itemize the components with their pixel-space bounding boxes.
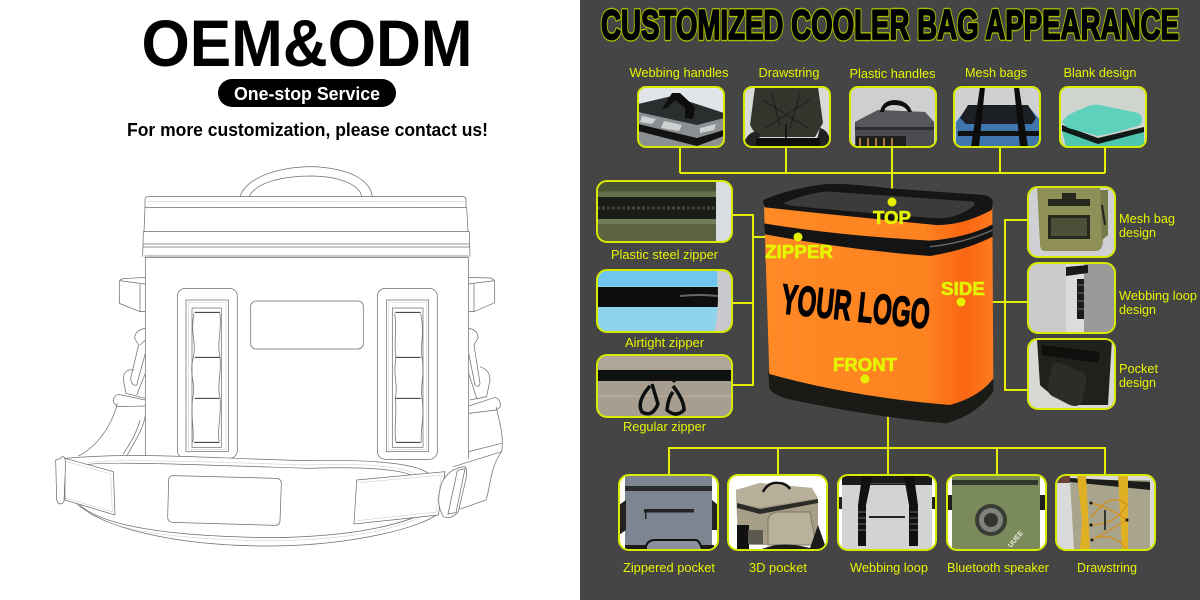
shoulder strap left tail [78, 403, 145, 456]
bag zipper band [764, 223, 993, 256]
top handle [240, 167, 372, 197]
shoulder pad [65, 455, 438, 546]
label: webbing handles: Webbing handles [630, 65, 729, 80]
label: 3D pocket: 3D pocket [749, 560, 807, 575]
marker: zipper: ZIPPER [765, 242, 833, 262]
thumbnail: webbing loop [838, 475, 936, 550]
connector: zipper options [732, 215, 798, 385]
label: mesh bags: Mesh bags [965, 65, 1027, 80]
label: webbing loop design: design [1119, 302, 1156, 317]
label: webbing loop design [1119, 288, 1197, 317]
marker: top: TOP [873, 208, 911, 228]
bag body [764, 207, 993, 405]
text: your logo: YOUR LOGO [779, 275, 932, 338]
left webbing and buckle [56, 456, 115, 515]
marker: zipper [765, 232, 833, 262]
label: regular zipper: Regular zipper [623, 419, 707, 434]
label: pocket design: Pocket [1119, 361, 1158, 376]
bag body sides [145, 258, 469, 458]
right webbing panel [377, 288, 437, 459]
side tab left [119, 277, 145, 312]
thumbnail: mesh bag design [1028, 187, 1115, 257]
thumbnail: 3D pocket [728, 475, 827, 550]
illustration: orange cooler bag [763, 184, 993, 423]
label: zippered pocket: Zippered pocket [623, 560, 715, 575]
thumbnail: plastic handles [850, 87, 936, 147]
label: plastic steel zipper: Plastic steel zipper [611, 247, 719, 262]
thumbnail: pocket design [1028, 339, 1115, 409]
thumbnail: airtight zipper [597, 270, 732, 332]
side tab right [469, 277, 495, 312]
bag rim [763, 184, 993, 225]
marker: side [941, 279, 985, 306]
thumbnail: drawstring [1056, 475, 1155, 550]
right carabiner [469, 328, 500, 413]
panel: OEM and ODM white side [0, 0, 580, 600]
marker: side: SIDE [941, 279, 985, 299]
label: mesh bag design: Mesh bag [1119, 211, 1175, 226]
subtitle: contact prompt: For more customization, please contact us! [127, 120, 488, 140]
right webbing and buckle [354, 467, 467, 524]
badge: One-stop Service [218, 79, 396, 107]
strap logo area [168, 476, 281, 525]
thumbnail: webbing loop design [1028, 263, 1115, 333]
marker: top [873, 198, 911, 228]
thumbnail: webbing handles [638, 87, 724, 147]
thumbnail: drawstring [744, 87, 830, 147]
label: blank design: Blank design [1064, 65, 1136, 80]
label: webbing loop: Webbing loop [850, 560, 928, 575]
label: mesh bag design [1119, 211, 1175, 240]
thumbnail: mesh bags [954, 87, 1040, 147]
logo area on body [251, 301, 363, 349]
title: OEM&ODM: OEM&ODM [142, 6, 472, 80]
bag base [768, 372, 993, 423]
connector: top options [680, 147, 1105, 202]
connector: side options [961, 220, 1028, 390]
thumbnail: blank design [1060, 87, 1146, 147]
badge: One-stop Service: One-stop Service [234, 84, 380, 104]
label: pocket design [1119, 361, 1158, 390]
thumbnail: bluetooth speaker [947, 475, 1046, 550]
panel: customized cooler bag appearance [580, 0, 1200, 600]
label: drawstring: Drawstring [758, 65, 820, 80]
line drawing: cooler bag template [56, 167, 502, 546]
label: mesh bag design: design [1119, 225, 1156, 240]
label: webbing loop design: Webbing loop [1119, 288, 1197, 303]
label: drawstring: Drawstring [1077, 560, 1137, 575]
thumbnail: bluetooth speaker: UUEE [1007, 530, 1025, 549]
lid and zipper bands [143, 197, 470, 258]
marker: front: FRONT [833, 355, 897, 375]
label: pocket design: design [1119, 375, 1156, 390]
shoulder strap right tail [453, 407, 502, 509]
left webbing panel [177, 288, 237, 458]
label: plastic handles: Plastic handles [850, 66, 936, 81]
connector: front options [669, 379, 1105, 475]
thumbnail: plastic steel zipper [597, 181, 732, 242]
marker: front [833, 355, 897, 384]
thumbnail: regular zipper [597, 355, 732, 417]
left carabiner [113, 328, 145, 407]
thumbnail: zippered pocket [619, 475, 718, 550]
label: bluetooth speaker: Bluetooth speaker [947, 560, 1050, 575]
label: airtight zipper: Airtight zipper [625, 335, 705, 350]
